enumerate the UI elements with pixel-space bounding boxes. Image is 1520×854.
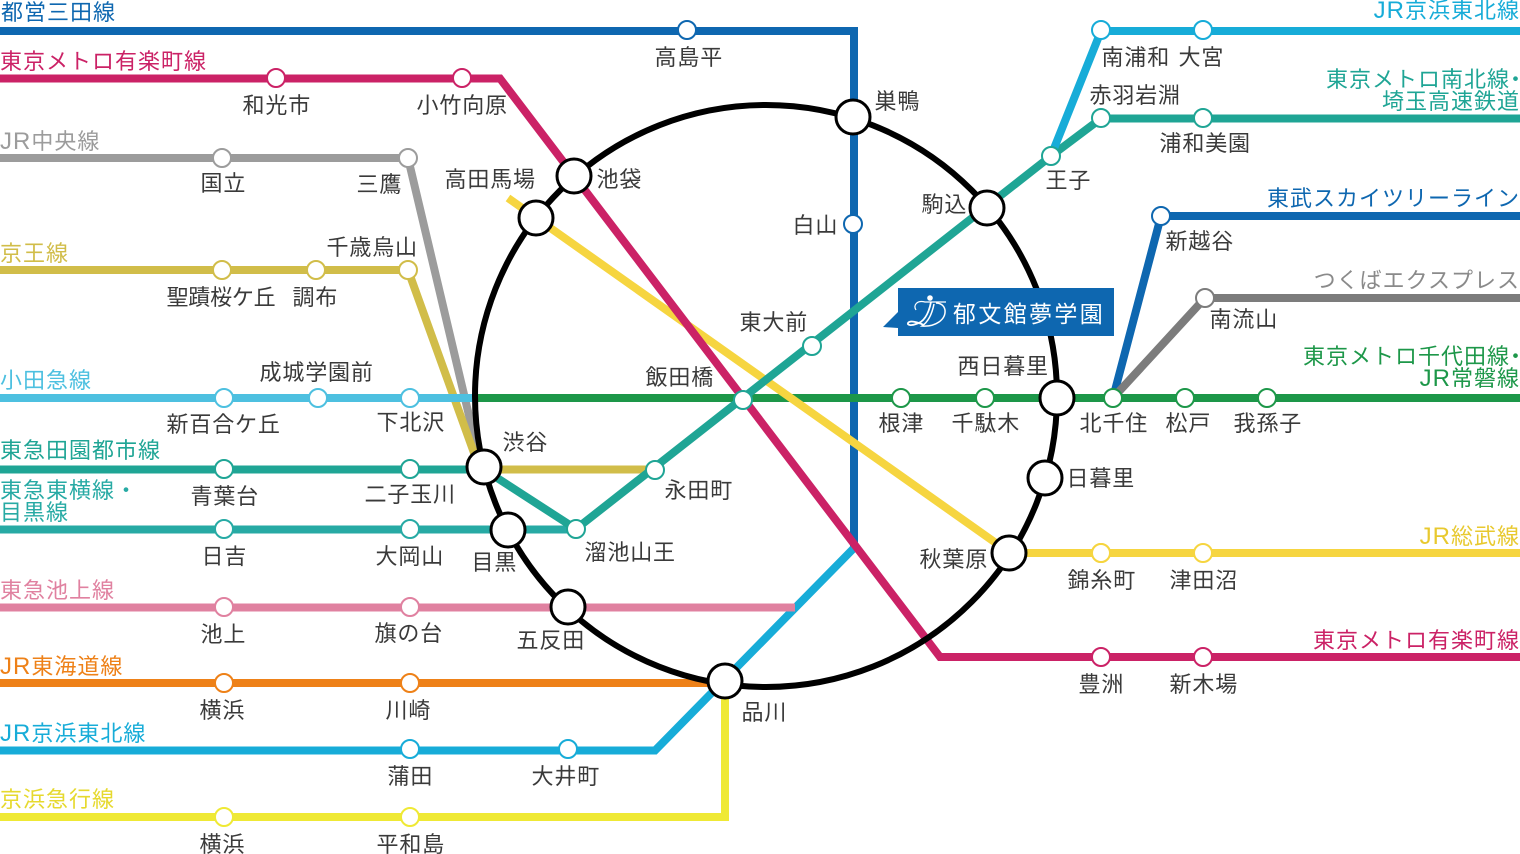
line: Chuo: 国立	[200, 171, 246, 196]
callout: school label: 郁文館夢学園	[953, 301, 1105, 327]
line: Namboku and Den-en-toshi	[0, 67, 1520, 565]
line: Yurakucho: 東京メトロ有楽町線	[1313, 628, 1520, 653]
line: Namboku and Den-en-toshi: 東京メトロ南北線	[1326, 67, 1510, 92]
line: Keihin-Tohoku south	[0, 548, 854, 789]
line: Toyoko: 東急東横線・	[0, 478, 138, 503]
line: Tobu Skytree: 東武スカイツリーライン	[1267, 186, 1520, 211]
line: Namboku and Den-en-toshi: 埼玉高速鉄道	[1382, 89, 1520, 114]
small stations on top of ring lines	[734, 21, 1214, 562]
line: Tsukuba Express: 南流山	[1210, 307, 1278, 332]
line: Keikyu: 京浜急行線	[0, 787, 115, 812]
line: Toei Mita: 高島平	[654, 45, 723, 70]
line: Tobu Skytree: 新越谷	[1166, 229, 1234, 254]
Yamanote ring	[475, 105, 1057, 687]
line: Keio: 調布	[292, 285, 338, 310]
line: Keio: 千歳烏山	[326, 235, 418, 260]
line: Ikegami: 東急池上線	[0, 578, 115, 603]
line: Tobu Skytree	[1113, 186, 1520, 398]
line: Namboku and Den-en-toshi: 青葉台	[190, 484, 259, 509]
line: Toyoko: 日吉	[202, 544, 247, 569]
Yamanote station labels	[444, 83, 1181, 725]
line: Tokaido	[0, 653, 725, 723]
Yamanote station labels: 駒込	[922, 192, 967, 217]
line: Chiyoda: JR常磐線	[1420, 365, 1520, 392]
line: Chiyoda: 北千住	[1080, 411, 1148, 436]
line: Ikegami: 池上	[200, 622, 246, 647]
line: Tsukuba Express	[1113, 268, 1520, 398]
callout: school label	[883, 288, 1114, 336]
line: Tokaido: 川崎	[386, 698, 431, 723]
line: Namboku and Den-en-toshi: 浦和美園	[1160, 131, 1251, 156]
Yamanote station labels: 渋谷	[502, 430, 548, 455]
line: Tsukuba Express: つくばエクスプレス	[1314, 268, 1520, 293]
line: Keihin-Tohoku north	[1051, 0, 1520, 156]
line: Keihin-Tohoku north: 大宮	[1178, 45, 1224, 70]
line: Ikegami	[0, 578, 795, 647]
line: Chiyoda: 松戸	[1166, 411, 1211, 436]
line: Chuo: 三鷹	[356, 172, 402, 197]
line: Chiyoda: 根津	[878, 411, 924, 436]
line: Odakyu	[0, 360, 476, 437]
line: Keihin-Tohoku south: 大井町	[532, 764, 600, 789]
line: Toyoko: 大岡山	[376, 544, 444, 569]
line: Chiyoda: 千駄木	[952, 411, 1020, 436]
Yamanote station labels: 西日暮里	[958, 354, 1049, 379]
Yamanote station labels: 日暮里	[1066, 466, 1135, 491]
line: Sobu: 錦糸町	[1068, 568, 1136, 593]
line: Namboku and Den-en-toshi: 永田町	[664, 478, 733, 503]
line: Keihin-Tohoku south: 蒲田	[388, 764, 433, 789]
line: Chiyoda	[475, 344, 1520, 436]
Yamanote station labels: 池袋	[596, 167, 642, 192]
line: Toyoko: 目黒線	[0, 500, 69, 525]
line: Yurakucho: 小竹向原	[416, 93, 508, 118]
line: Chiyoda: 東京メトロ千代田線	[1303, 344, 1510, 369]
icon: school logo	[908, 295, 946, 326]
line: Chuo: JR中央線	[0, 128, 100, 155]
line: Yurakucho: 東京メトロ有楽町線	[0, 49, 207, 74]
Yamanote station labels: 巣鴨	[874, 89, 920, 114]
line: Toei Mita	[0, 0, 862, 550]
line: Chiyoda: 飯田橋	[646, 365, 714, 390]
Yamanote station labels: 秋葉原	[920, 547, 988, 572]
Yamanote station labels: 目黒	[472, 550, 517, 575]
Yamanote station labels: 品川	[742, 700, 787, 725]
line: Tokaido: JR東海道線	[0, 653, 123, 680]
line: Toei Mita: 白山	[792, 213, 838, 238]
line: Odakyu: 小田急線	[0, 368, 92, 393]
line: Keikyu	[0, 681, 725, 854]
line: Namboku and Den-en-toshi: 二子玉川	[364, 482, 456, 507]
line: Toyoko	[0, 478, 576, 569]
line: Chuo	[0, 128, 480, 462]
line: Keihin-Tohoku north: 南浦和	[1102, 45, 1170, 70]
Yamanote station labels: 王子	[1046, 168, 1091, 193]
line: Odakyu: 下北沢	[376, 410, 445, 435]
line: Ikegami: 旗の台	[374, 621, 443, 646]
Yamanote station labels: 赤羽岩淵	[1090, 83, 1181, 108]
line: Toei Mita: 都営三田線	[1, 0, 116, 25]
line: Yurakucho	[0, 49, 1520, 697]
line: Namboku and Den-en-toshi: 東大前	[740, 310, 808, 335]
line: Namboku and Den-en-toshi: 東急田園都市線	[0, 438, 161, 463]
line: Tokaido: 横浜	[200, 698, 245, 723]
line: Keio: 聖蹟桜ケ丘	[166, 285, 276, 310]
line: Yurakucho: 新木場	[1170, 672, 1238, 697]
line: Odakyu: 新百合ケ丘	[166, 412, 281, 437]
line: Yurakucho: 豊洲	[1078, 672, 1124, 697]
line: Keio	[0, 235, 655, 470]
line: Keihin-Tohoku south: JR京浜東北線	[0, 720, 146, 747]
line: Sobu	[508, 198, 1520, 593]
line: Sobu: JR総武線	[1420, 523, 1520, 550]
Yamanote station labels: 高田馬場	[444, 167, 536, 192]
Yamanote station labels: 五反田	[516, 628, 585, 653]
line: Sobu: 津田沼	[1170, 568, 1238, 593]
line: Yurakucho: 和光市	[242, 93, 311, 118]
line: Odakyu: 成城学園前	[260, 360, 374, 385]
line: Namboku and Den-en-toshi: 溜池山王	[584, 540, 676, 565]
line: Keio: 京王線	[0, 241, 69, 266]
line: Chiyoda: 我孫子	[1234, 411, 1302, 436]
interchange stations	[467, 100, 1074, 698]
